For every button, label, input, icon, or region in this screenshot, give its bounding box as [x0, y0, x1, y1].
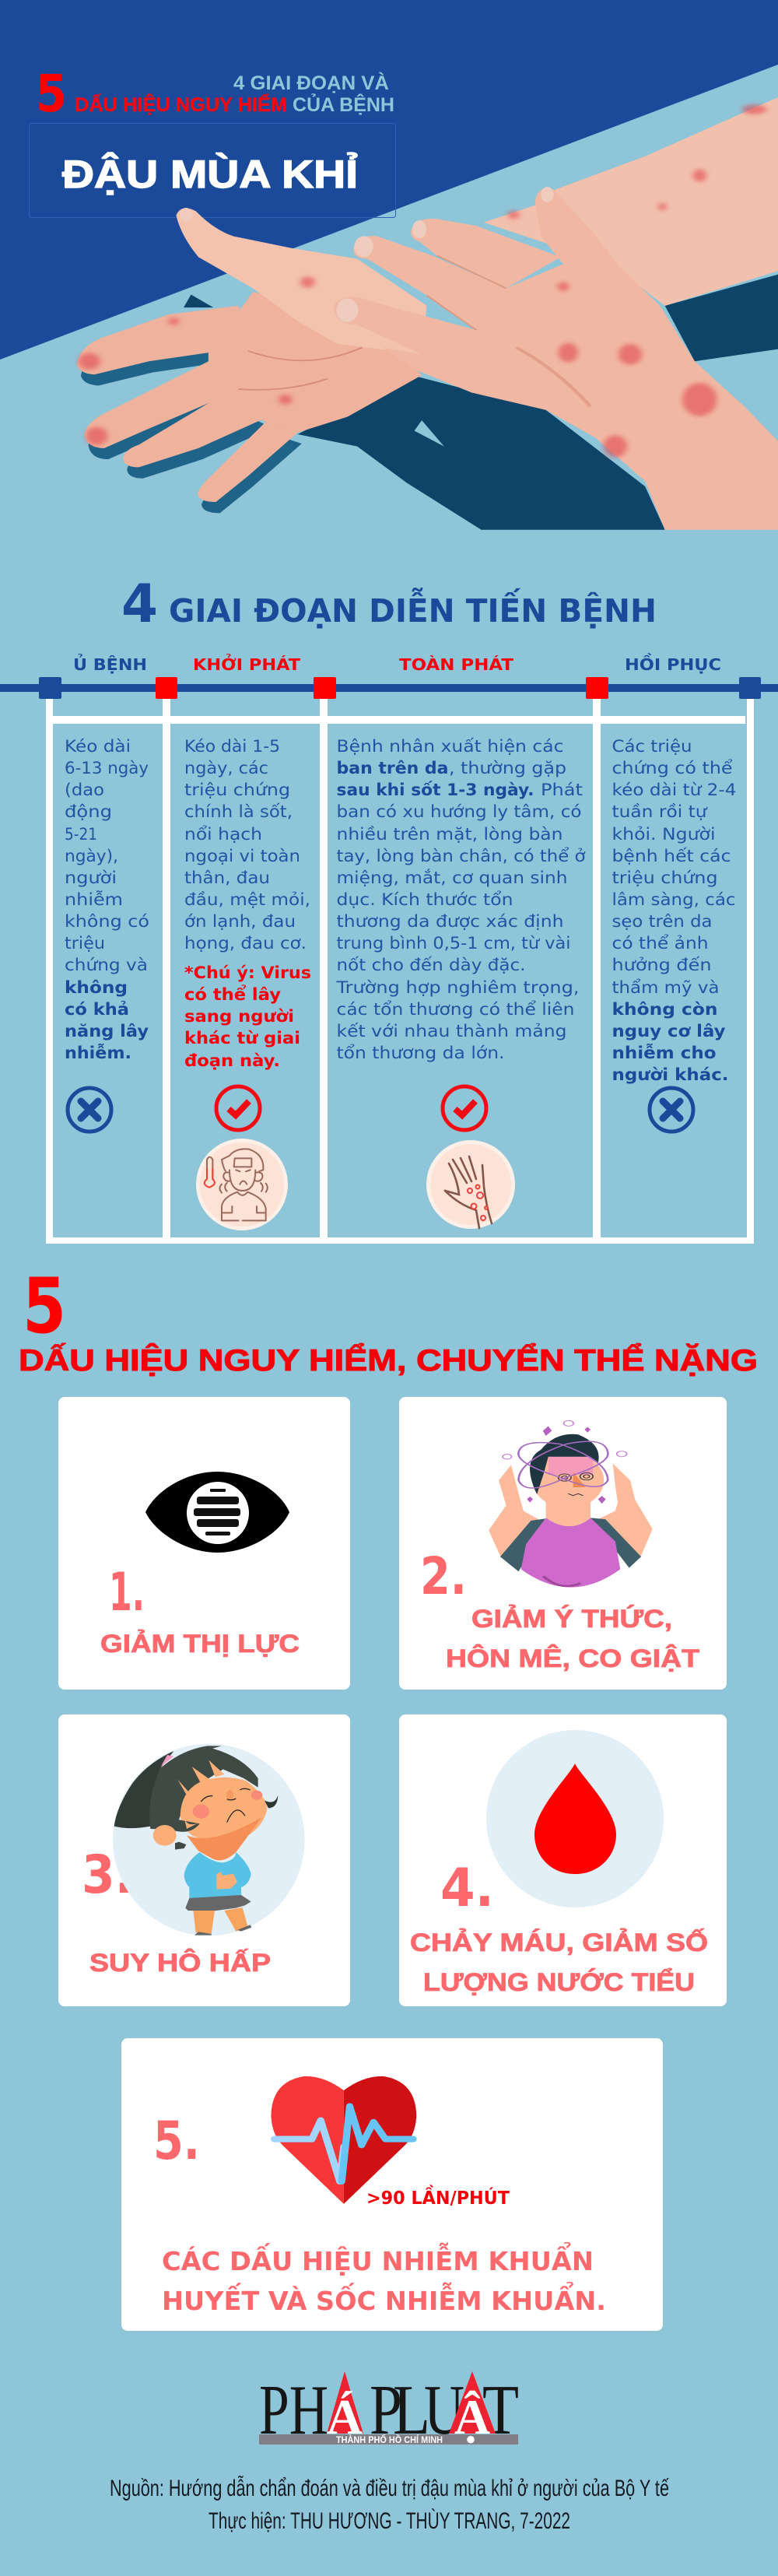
label 2: HÔN MÊ, CO GIẬT — [446, 1644, 700, 1672]
column text: Khởi phát: Kéo dài 1-5 — [184, 737, 280, 756]
label 4 — [410, 1928, 708, 1996]
column text: Khởi phát: ngoại vi toàn — [184, 847, 300, 866]
card 5 — [121, 2038, 663, 2331]
column text: Hồi phục: khỏi. Người — [612, 825, 716, 844]
column text: Toàn phát: nốt cho đến dày đặc. — [336, 956, 526, 975]
number 3: 3. — [82, 1844, 133, 1906]
label 2: GIẢM Ý THỨC, — [471, 1605, 672, 1633]
column text: Toàn phát: Trường hợp nghiêm trọng, — [335, 978, 579, 998]
illustration: child with breathing difficulty — [113, 1744, 305, 1936]
icon: cross, stage 1 — [68, 1088, 111, 1132]
column text: Toàn phát: miệng, mắt, cơ quan sinh — [336, 869, 568, 888]
card 2 — [399, 1397, 727, 1690]
column text: Hồi phục: tuần rồi tự — [612, 802, 708, 822]
column text: Hồi phục — [612, 737, 736, 1085]
column text: Toàn phát — [335, 737, 585, 1063]
right hand — [180, 187, 778, 530]
title box — [30, 123, 395, 218]
logo: Pháp Luật — [259, 2371, 519, 2449]
column text: Ủ bệnh: 6-13 ngày — [65, 759, 149, 778]
column text: Toàn phát: Bệnh nhân xuất hiện các — [336, 737, 563, 756]
column text: Hồi phục: lâm sàng, các — [612, 890, 736, 910]
column text: Khởi phát: thân, đau — [184, 869, 270, 888]
logo: Pháp Luật: PH — [259, 2371, 328, 2449]
column text: Ủ bệnh: không có — [65, 912, 149, 932]
icon: eye — [145, 1472, 289, 1553]
icon: check, stage 2 — [216, 1086, 260, 1130]
column text: Toàn phát: nhiều trên mặt, lòng bàn — [336, 825, 563, 844]
icon: heart with pulse — [271, 2076, 416, 2204]
column text: Ủ bệnh: có khả — [65, 1000, 129, 1020]
logo: Pháp Luật: L — [393, 2371, 430, 2449]
column text: Hồi phục: người khác. — [612, 1065, 728, 1085]
source credits: Thực hiện: THU HƯƠNG - THÙY TRANG, 7-2022 — [209, 2508, 570, 2534]
column text: Ủ bệnh: nhiễm. — [65, 1044, 131, 1063]
label 5: HUYẾT VÀ SỐC NHIỄM KHUẨN. — [162, 2281, 606, 2316]
number 4: 4. — [440, 1858, 494, 1919]
column text: Khởi phát: ớn lạnh, đau — [184, 912, 296, 932]
panel: four stages — [0, 574, 778, 1244]
column text: Toàn phát: trung bình 0,5-1 cm, từ vài — [336, 934, 571, 953]
column text: Ủ bệnh: triệu — [65, 934, 105, 953]
heading number 5: 5 — [23, 1262, 66, 1351]
title: 5: 5 — [36, 64, 67, 124]
panel: header — [0, 0, 778, 530]
column text: Hồi phục: không còn — [612, 1000, 717, 1020]
number 5: 5. — [153, 2111, 200, 2172]
main title: ĐẬU MÙA KHỈ — [62, 153, 358, 196]
column text: Khởi phát: khác từ giai — [184, 1029, 300, 1048]
column text: Ủ bệnh: 5-21 — [65, 825, 97, 844]
column text: Khởi phát: có thể lây — [184, 984, 281, 1005]
logo: Pháp Luật: P — [370, 2371, 402, 2449]
stage labels: TOÀN PHÁT — [399, 655, 513, 674]
subtitle line 2: CỦA BỆNH — [293, 93, 394, 116]
column text: Hồi phục: bệnh hết các — [612, 847, 731, 866]
column text: Ủ bệnh: Kéo dài — [65, 737, 131, 756]
logo: Pháp Luật: Á — [327, 2389, 363, 2444]
label 5 — [162, 2241, 606, 2316]
column text: Toàn phát: kết với nhau thành mảng — [336, 1022, 566, 1041]
stage labels: KHỞI PHÁT — [193, 655, 300, 674]
column text: Khởi phát: nổi hạch — [184, 825, 262, 844]
subtitle line 1: 4 GIAI ĐOẠN VÀ — [233, 72, 389, 94]
column text: Hồi phục: nhiễm cho — [612, 1044, 716, 1063]
column text: Toàn phát: dục. Kích thước tổn — [336, 890, 513, 910]
card 4 — [399, 1714, 727, 2006]
heart rate label: >90 LẦN/PHÚT — [366, 2185, 510, 2209]
column text: Toàn phát: , thường gặp — [449, 759, 566, 778]
label 4: CHẢY MÁU, GIẢM SỐ — [410, 1928, 708, 1957]
icon: check, stage 3 — [443, 1086, 486, 1130]
column text: Ủ bệnh: động — [65, 802, 112, 822]
column text: Ủ bệnh — [65, 737, 149, 1063]
logo: Pháp Luật: THÀNH PHỐ HỒ CHÍ MINH — [336, 2434, 443, 2445]
label 3: SUY HÔ HẤP — [89, 1949, 271, 1977]
column text: Hồi phục: sẹo trên da — [612, 912, 713, 932]
stage labels: Ủ BỆNH — [73, 655, 147, 674]
column text: Hồi phục: thẩm mỹ và — [612, 978, 719, 998]
column text: Ủ bệnh: chứng và — [65, 956, 148, 975]
column text: Ủ bệnh: (dao — [65, 781, 104, 800]
number 2: 2. — [420, 1546, 467, 1606]
column text: Toàn phát: ban trên da — [336, 759, 448, 778]
column text: Toàn phát: Phát — [541, 781, 583, 800]
icon: cross, stage 4 — [650, 1088, 693, 1132]
label 4: LƯỢNG NƯỚC TIỂU — [423, 1968, 695, 1996]
column text: Khởi phát: triệu chứng — [184, 781, 290, 800]
column text: Hồi phục: có thể ảnh — [612, 934, 708, 953]
column text: Khởi phát — [184, 737, 311, 1071]
column text: Toàn phát: tay, lòng bàn chân, có thể ở — [336, 847, 585, 866]
column text: Hồi phục: Các triệu — [612, 737, 692, 756]
column text: Hồi phục: hưởng đến — [612, 956, 711, 975]
column text: Khởi phát: *Chú ý: Virus — [184, 963, 311, 983]
column text: Khởi phát: đầu, mệt mỏi, — [184, 890, 310, 910]
panel: danger signs — [19, 1262, 758, 2331]
logo: Pháp Luật: T — [482, 2371, 519, 2449]
heading: 4 stages: 4 — [121, 574, 158, 635]
card 1 — [58, 1397, 350, 1690]
column text: Ủ bệnh: không — [65, 978, 128, 998]
column text: Khởi phát: sang người — [184, 1007, 294, 1027]
column text: Hồi phục: chứng có thể — [612, 759, 733, 778]
stage labels — [73, 654, 721, 674]
source credits — [110, 2476, 669, 2534]
left hand — [77, 208, 427, 502]
column text: Ủ bệnh: nhiễm — [65, 890, 123, 910]
icon: hand with rash — [426, 1140, 515, 1229]
icon: feverish person — [196, 1139, 288, 1230]
icon: blood drop — [486, 1730, 664, 1907]
subtitle line 2: DẤU HIỆU NGUY HIỂM — [75, 93, 287, 116]
logo: Pháp Luật: U — [424, 2371, 464, 2449]
column text: Khởi phát: đoạn này. — [184, 1051, 280, 1071]
column text: Hồi phục: triệu chứng — [612, 869, 717, 888]
column text: Hồi phục: nguy cơ lây — [612, 1022, 725, 1041]
column text: Ủ bệnh: người — [65, 869, 117, 888]
timeline — [0, 677, 778, 699]
photo: hands with rash — [77, 97, 778, 530]
logo: Pháp Luật: Ậ — [454, 2389, 490, 2444]
card 3 — [58, 1714, 350, 2006]
rash spots — [79, 104, 766, 458]
label 1: GIẢM THỊ LỰC — [100, 1630, 300, 1658]
column text: Ủ bệnh: ngày), — [65, 847, 118, 866]
number 1: 1. — [109, 1562, 145, 1623]
column text: Hồi phục: kéo dài từ 2-4 — [612, 781, 736, 800]
white frame — [46, 699, 754, 1244]
column text: Toàn phát: tổn thương da lớn. — [336, 1044, 504, 1063]
arm — [484, 97, 778, 306]
column text: Toàn phát: sau khi sốt 1-3 ngày. — [336, 781, 534, 800]
column text: Ủ bệnh: năng lây — [65, 1022, 149, 1041]
column text: Khởi phát: ngày, các — [184, 759, 268, 778]
column text: Toàn phát: thương da được xác định — [336, 912, 563, 932]
label 2 — [446, 1605, 700, 1672]
subtitle line 2 — [75, 93, 394, 116]
stage labels: HỒI PHỤC — [625, 654, 721, 674]
column text: Toàn phát: các tổn thương có thể liên — [336, 1000, 574, 1020]
heading: DẤU HIỆU NGUY HIỂM, CHUYỂN THỂ NẶNG — [19, 1342, 758, 1377]
finger shadows — [81, 317, 302, 513]
heading: 4 stages — [121, 574, 657, 635]
heading: 4 stages: GIAI ĐOẠN DIỄN TIẾN BỆNH — [169, 588, 657, 630]
column text: Khởi phát: chính là sốt, — [184, 802, 293, 822]
column text: Toàn phát: ban có xu hướng ly tâm, có — [336, 802, 582, 822]
label 5: CÁC DẤU HIỆU NHIỄM KHUẨN — [162, 2241, 594, 2276]
illustration: dizzy person — [489, 1420, 653, 1588]
column text: Khởi phát: họng, đau cơ. — [184, 934, 307, 953]
